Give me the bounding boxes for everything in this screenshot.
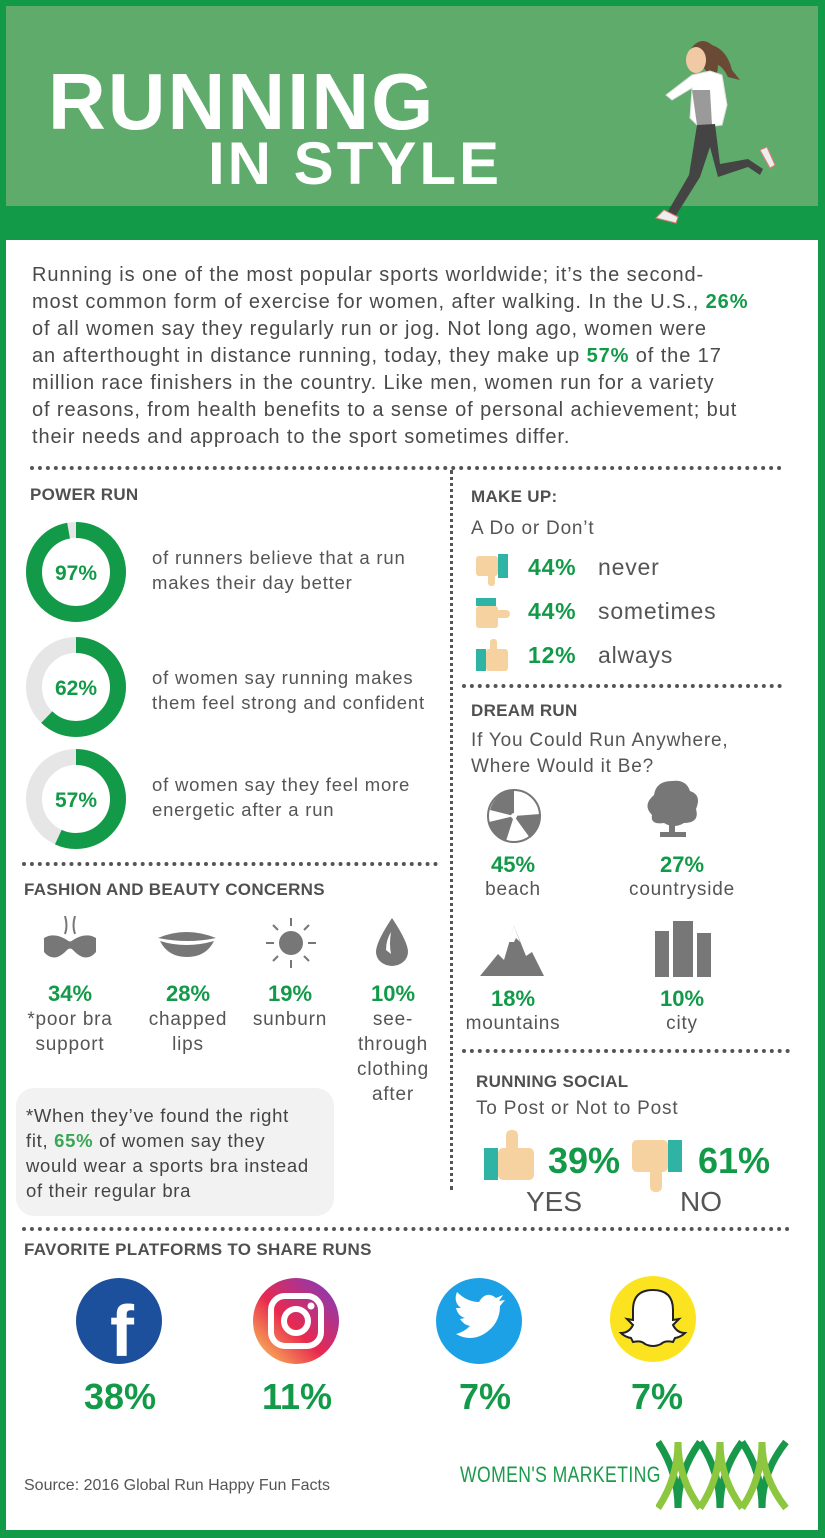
- stat yes: 39%: [548, 1140, 620, 1181]
- icon: no thumb: [632, 1140, 682, 1192]
- panel: fashion and beauty: after: [372, 1084, 414, 1105]
- icon: lips: [158, 932, 216, 957]
- panel: dream run: If You Could Run Anywhere,: [471, 730, 728, 751]
- stat beach: [485, 852, 541, 900]
- heading: RUNNING SOCIAL: [476, 1072, 628, 1091]
- panel: fashion and beauty: [16, 880, 429, 1216]
- stats row: [27, 981, 113, 1055]
- stat city: [660, 986, 704, 1034]
- panel: running social: [476, 1072, 770, 1217]
- heading: FAVORITE PLATFORMS TO SHARE RUNS: [24, 1240, 372, 1259]
- icon: bra: [44, 916, 96, 958]
- stat beach: 45%: [491, 852, 535, 877]
- stat countryside: [629, 852, 735, 900]
- stat city: 10%: [660, 986, 704, 1011]
- panel: platforms: 7%: [459, 1376, 511, 1417]
- stat beach: beach: [485, 879, 541, 900]
- text 62: [152, 667, 425, 713]
- intro paragraph: Running is one of the most popular sports worldwide; it’s the second-: [32, 264, 704, 286]
- text 57: [152, 774, 410, 820]
- stats: 38%: [84, 1376, 156, 1417]
- panel: running social: To Post or Not to Post: [476, 1098, 678, 1119]
- icon: beach ball: [487, 789, 541, 843]
- icon: instagram: [253, 1278, 339, 1364]
- callout: sports bra: *When they’ve found the right: [26, 1105, 289, 1126]
- heading: FASHION AND BEAUTY CONCERNS: [24, 880, 325, 899]
- callout: sports bra: [16, 1088, 334, 1216]
- icon: facebook: [76, 1278, 162, 1364]
- callout: sports bra: would wear a sports bra instead: [26, 1155, 309, 1176]
- panel: make up: A Do or Don’t: [471, 518, 594, 539]
- icon: twitter: [436, 1278, 522, 1364]
- source: Source: 2016 Global Run Happy Fun Facts: [24, 1477, 330, 1494]
- header banner: [6, 6, 818, 206]
- panel: dream run: Where Would it Be?: [471, 756, 654, 777]
- icon: thumbs down: [476, 554, 508, 586]
- text 97: of runners believe that a run: [152, 547, 406, 568]
- panel: fashion and beauty: 28%: [166, 981, 210, 1006]
- panel: platforms: 7%: [631, 1376, 683, 1417]
- intro paragraph: million race finishers in the country. Like men, women run for a variety: [32, 372, 714, 394]
- panel: platforms: 11%: [262, 1376, 332, 1417]
- icon: thumb sideways: [476, 598, 510, 628]
- callout: sports bra: of their regular bra: [26, 1180, 191, 1201]
- text 97: [152, 547, 406, 593]
- donut 97%: 97%: [55, 562, 97, 585]
- stat mountains: mountains: [466, 1013, 560, 1034]
- intro paragraph: of all women say they regularly run or jog. Not long ago, women were: [32, 318, 707, 340]
- icon: city: [655, 921, 711, 977]
- panel: fashion and beauty: 10%: [371, 981, 415, 1006]
- panel: fashion and beauty: sunburn: [253, 1009, 327, 1030]
- donut 57%: [26, 749, 126, 849]
- text 62: them feel strong and confident: [152, 692, 425, 713]
- panel: fashion and beauty: chapped: [149, 1009, 227, 1030]
- heading: MAKE UP:: [471, 487, 557, 506]
- intro paragraph: an afterthought in distance running, today, they make up 57% of the 17: [32, 345, 722, 367]
- icon: thumbs up: [476, 639, 508, 671]
- logo: women's marketing: WOMEN'S MARKETING: [460, 1462, 661, 1487]
- panel: running social: YES: [526, 1186, 582, 1217]
- panel: running social: NO: [680, 1186, 722, 1217]
- heading: DREAM RUN: [471, 701, 578, 720]
- icon: snapchat: [610, 1276, 696, 1362]
- donut 62%: 62%: [55, 677, 97, 700]
- text 62: of women say running makes: [152, 667, 413, 688]
- stat city: city: [666, 1013, 698, 1034]
- panel: fashion and beauty: lips: [172, 1034, 204, 1055]
- stat countryside: countryside: [629, 879, 735, 900]
- intro paragraph: their needs and approach to the sport sometimes differ.: [32, 426, 570, 448]
- panel: make up: 44% never: [528, 554, 660, 580]
- stats row: support: [36, 1034, 104, 1055]
- icon: drop: [376, 918, 408, 966]
- title: RUNNING: [48, 57, 435, 146]
- text 97: makes their day better: [152, 572, 353, 593]
- illustration: runner: [655, 41, 776, 224]
- donut 57%: 57%: [55, 789, 97, 812]
- heading: power run: POWER RUN: [30, 485, 138, 504]
- panel: make up: 44% sometimes: [528, 598, 716, 624]
- panel: fashion and beauty: clothing: [357, 1059, 429, 1080]
- panel: fashion and beauty: through: [358, 1034, 428, 1055]
- intro paragraph: most common form of exercise for women, after walking. In the U.S., 26%: [32, 291, 748, 313]
- panel: power run: [26, 485, 425, 849]
- stats row: 34%: [48, 981, 92, 1006]
- stat mountains: 18%: [491, 986, 535, 1011]
- text 57: energetic after a run: [152, 799, 334, 820]
- panel: make up: 12% always: [528, 642, 673, 668]
- icon: tree: [648, 780, 698, 837]
- donut 97%: [26, 522, 126, 622]
- panel: platforms: [24, 1240, 696, 1417]
- icon: sun: [266, 918, 316, 968]
- panel: dream run: [466, 701, 735, 1034]
- subtitle: IN STYLE: [208, 130, 502, 197]
- stats row: *poor bra: [27, 1009, 113, 1030]
- logo: women's marketing: [460, 1440, 789, 1510]
- panel: fashion and beauty: see-: [373, 1009, 413, 1030]
- panel: fashion and beauty: 19%: [268, 981, 312, 1006]
- icon: mountain: [480, 926, 544, 976]
- text 57: of women say they feel more: [152, 774, 410, 795]
- stat mountains: [466, 986, 560, 1034]
- panel: make up: [471, 487, 716, 671]
- callout: sports bra: fit, 65% of women say they: [26, 1130, 265, 1151]
- icon: yes thumb: [484, 1130, 534, 1180]
- intro paragraph: [32, 264, 748, 448]
- intro paragraph: of reasons, from health benefits to a sense of personal achievement; but: [32, 399, 737, 421]
- stat countryside: 27%: [660, 852, 704, 877]
- stat no: 61%: [698, 1140, 770, 1181]
- donut 62%: [26, 637, 126, 737]
